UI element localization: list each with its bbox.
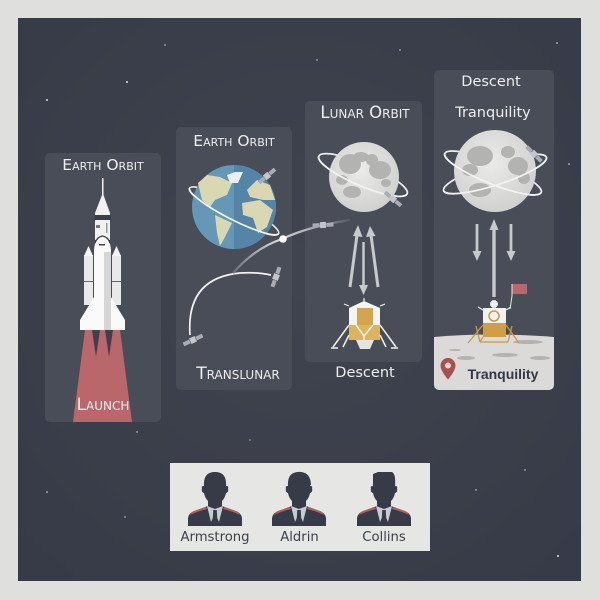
crew member: Collins: Collins bbox=[362, 530, 406, 545]
exhaust plume bbox=[73, 330, 132, 422]
icon: moon bbox=[329, 142, 399, 212]
panel background bbox=[45, 153, 161, 422]
panel background bbox=[434, 70, 554, 390]
panel: lunar orbit bbox=[305, 101, 422, 381]
icon: satellite bbox=[270, 266, 282, 288]
orbit ring back bbox=[185, 180, 283, 242]
orbit ring front bbox=[319, 156, 407, 196]
heading: earth orbit: Earth Orbit bbox=[62, 156, 144, 174]
panel: tranquility bbox=[434, 70, 554, 390]
icon: lunar lander bbox=[331, 298, 398, 349]
icon: satellite bbox=[257, 167, 277, 185]
crew background bbox=[170, 463, 430, 551]
label: descent: Descent bbox=[335, 365, 395, 381]
orbit rings back bbox=[440, 143, 550, 203]
heading: tranquility: Tranquility bbox=[454, 105, 531, 121]
crew member: Armstrong bbox=[180, 472, 250, 545]
panel background bbox=[176, 127, 292, 390]
icon: satellite bbox=[383, 190, 403, 208]
translunar trajectory bbox=[233, 220, 350, 273]
orbit ring front bbox=[189, 188, 278, 235]
icon: moon bbox=[454, 130, 536, 212]
crew member: Collins bbox=[357, 472, 411, 545]
orbit ring back bbox=[315, 146, 411, 204]
icon: flag bbox=[510, 284, 527, 309]
icon: earth bbox=[192, 165, 276, 249]
icon: map pin bbox=[440, 358, 456, 380]
orbit rings front bbox=[444, 154, 547, 195]
label: translunar: Translunar bbox=[195, 364, 280, 384]
label: launch: Launch bbox=[77, 395, 129, 415]
crew member: Aldrin: Aldrin bbox=[280, 530, 319, 545]
heading: lunar orbit: Lunar Orbit bbox=[320, 103, 410, 122]
crew member: Aldrin bbox=[272, 472, 326, 545]
panel: crew bbox=[170, 463, 430, 551]
icon: lunar lander bbox=[468, 300, 519, 343]
arrows bbox=[350, 225, 378, 295]
transfer arc bbox=[190, 273, 271, 335]
heading: earth orbit: Earth Orbit bbox=[193, 132, 275, 150]
icon: satellite bbox=[312, 221, 334, 229]
node bbox=[279, 235, 287, 243]
icon: rocket bbox=[80, 178, 125, 357]
panel background bbox=[305, 101, 422, 362]
stars bbox=[46, 42, 570, 557]
panel: earth orbit launch bbox=[45, 153, 161, 422]
crew member: Armstrong: Armstrong bbox=[180, 530, 250, 545]
heading: descent: Descent bbox=[461, 74, 521, 90]
icon: satellite bbox=[524, 144, 544, 164]
arrows bbox=[472, 219, 516, 297]
icon: satellite bbox=[182, 333, 204, 347]
label: tranquility: Tranquility bbox=[468, 366, 539, 382]
panel: earth orbit translunar bbox=[176, 127, 292, 390]
lunar surface bbox=[434, 334, 554, 390]
